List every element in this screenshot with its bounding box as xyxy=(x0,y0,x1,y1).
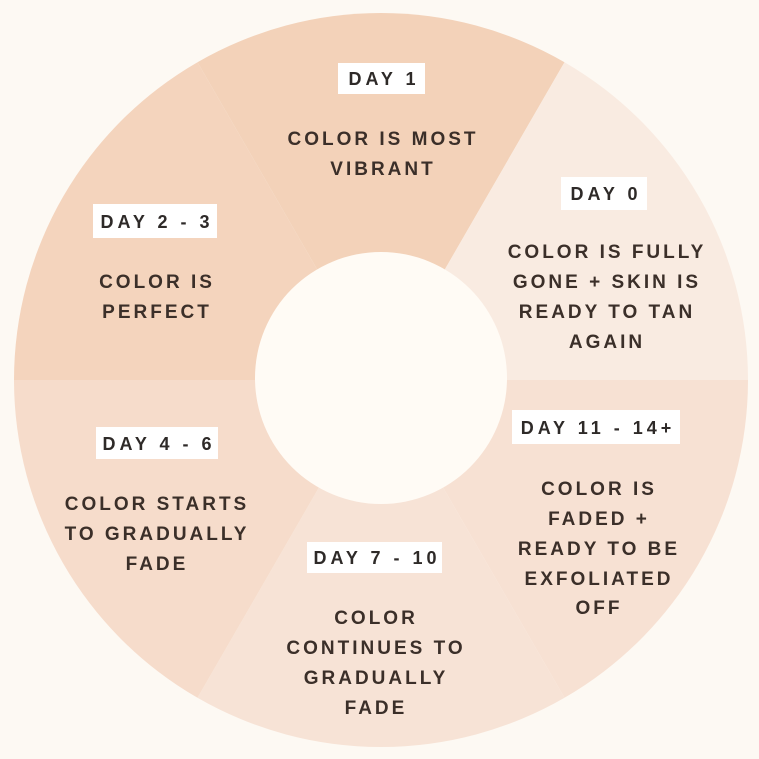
text: day 4-6: TO GRADUALLY xyxy=(65,524,249,545)
panel: day 2-3 xyxy=(93,204,217,323)
label: day 11-14+ xyxy=(512,410,680,444)
segment: day 0 xyxy=(381,62,748,380)
label: day 7-10 xyxy=(307,542,442,573)
text: day 0: AGAIN xyxy=(569,332,645,353)
text: day 4-6: FADE xyxy=(126,554,188,575)
text: day 11-14+: READY TO BE xyxy=(518,539,680,560)
text: day 1: VIBRANT xyxy=(330,159,436,180)
segment: day 7-10 xyxy=(198,380,564,747)
text: day 11-14+: EXFOLIATED xyxy=(525,569,673,590)
label: day 7-10: DAY 7 - 10 xyxy=(313,548,441,568)
panel: day 4-6 xyxy=(65,427,249,575)
segment: day 2-3 xyxy=(14,62,381,380)
panel: day 7-10 xyxy=(286,542,466,719)
segment: day 11-14+ xyxy=(381,380,748,698)
text: day 11-14+: OFF xyxy=(576,598,622,619)
label: day 1: DAY 1 xyxy=(348,69,420,89)
label: day 2-3: DAY 2 - 3 xyxy=(100,212,214,232)
label: day 0: DAY 0 xyxy=(570,184,642,204)
text: day 1: COLOR IS MOST xyxy=(288,129,478,150)
label: day 11-14+: DAY 11 - 14+ xyxy=(521,418,675,438)
text: day 7-10: GRADUALLY xyxy=(304,668,448,689)
segment: day 4-6 xyxy=(14,380,381,698)
text: day 2-3: COLOR IS xyxy=(99,272,215,293)
label: day 4-6 xyxy=(96,427,218,459)
text: day 0: COLOR IS FULLY xyxy=(508,242,706,263)
label: day 0 xyxy=(561,177,647,210)
text: day 7-10: CONTINUES TO xyxy=(286,638,466,659)
text: day 7-10: FADE xyxy=(345,698,407,719)
label: day 1 xyxy=(338,63,425,94)
segment: day 1 xyxy=(198,13,564,380)
text: day 11-14+: FADED + xyxy=(548,509,650,530)
text: day 7-10: COLOR xyxy=(334,608,418,629)
text: day 11-14+: COLOR IS xyxy=(541,479,657,500)
center hole xyxy=(255,252,507,504)
panel: day 1 xyxy=(288,63,478,180)
text: day 2-3: PERFECT xyxy=(102,302,212,323)
panel: day 0 xyxy=(508,177,706,353)
text: day 0: GONE + SKIN IS xyxy=(513,272,701,293)
panel: day 11-14+ xyxy=(512,410,680,619)
text: day 0: READY TO TAN xyxy=(519,302,695,323)
label: day 4-6: DAY 4 - 6 xyxy=(102,434,216,454)
text: day 4-6: COLOR STARTS xyxy=(65,494,249,515)
